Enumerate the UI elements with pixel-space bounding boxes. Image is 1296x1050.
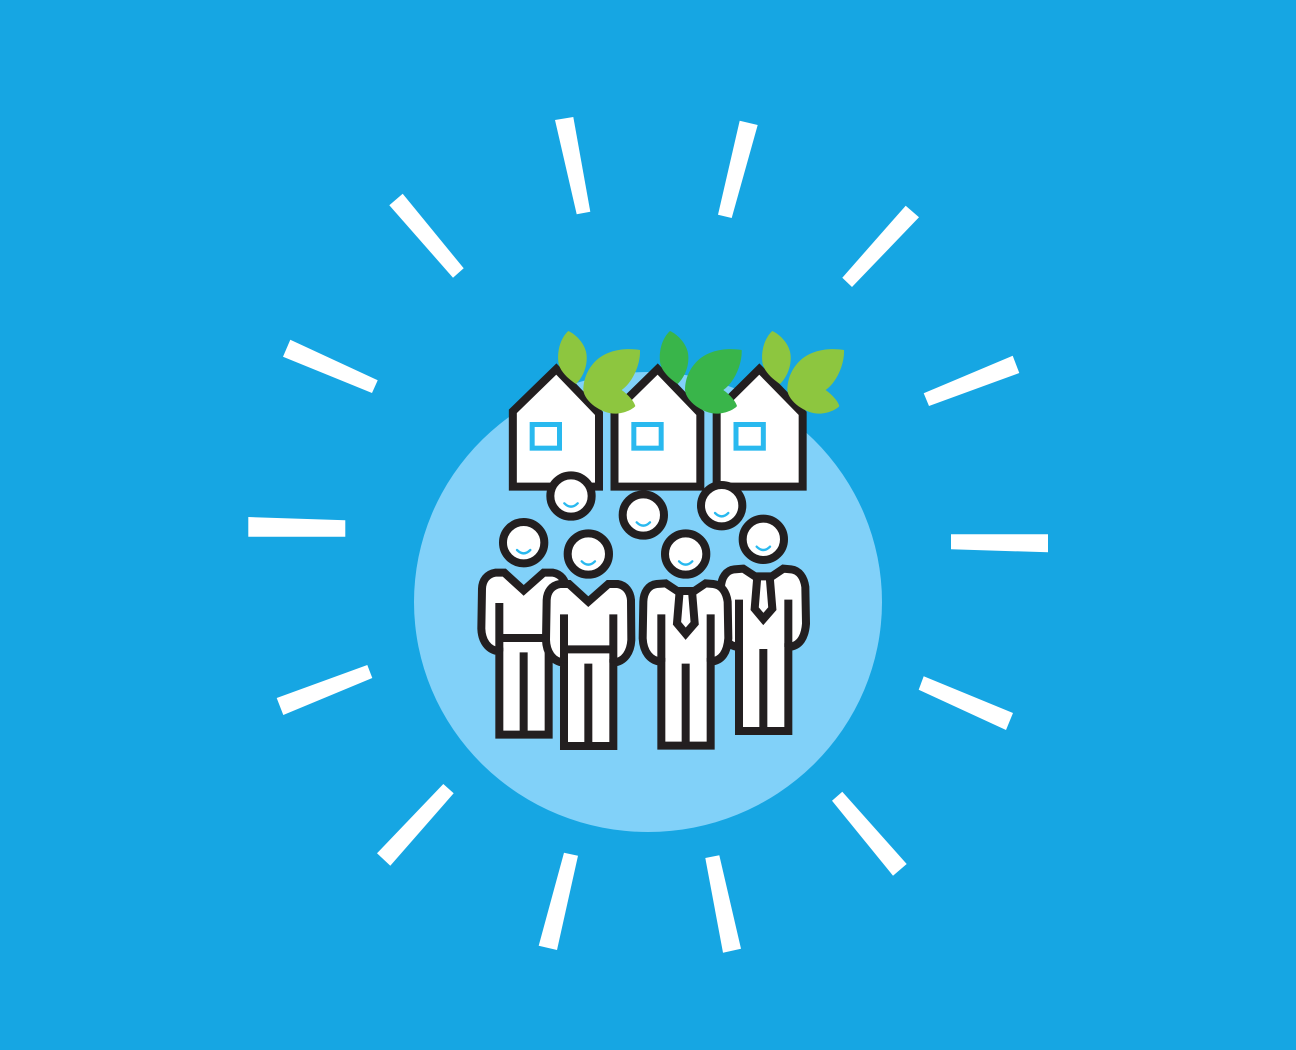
central light blue circle <box>414 372 882 832</box>
person 2 <box>546 533 631 746</box>
sunburst rays <box>248 117 1048 953</box>
person 1 <box>481 522 567 735</box>
person 3 <box>643 533 728 746</box>
house 3 <box>717 369 803 487</box>
floating head 2 <box>623 494 664 536</box>
leaves 1 <box>558 331 640 414</box>
houses, leaves and floating heads <box>513 331 844 536</box>
leaves 2 <box>660 331 742 414</box>
floating head 1 <box>550 475 592 517</box>
floating head 3 <box>701 485 742 526</box>
house 2 <box>614 369 700 487</box>
person 4 <box>720 519 806 731</box>
house 1 <box>513 369 599 487</box>
leaves 3 <box>762 331 844 414</box>
